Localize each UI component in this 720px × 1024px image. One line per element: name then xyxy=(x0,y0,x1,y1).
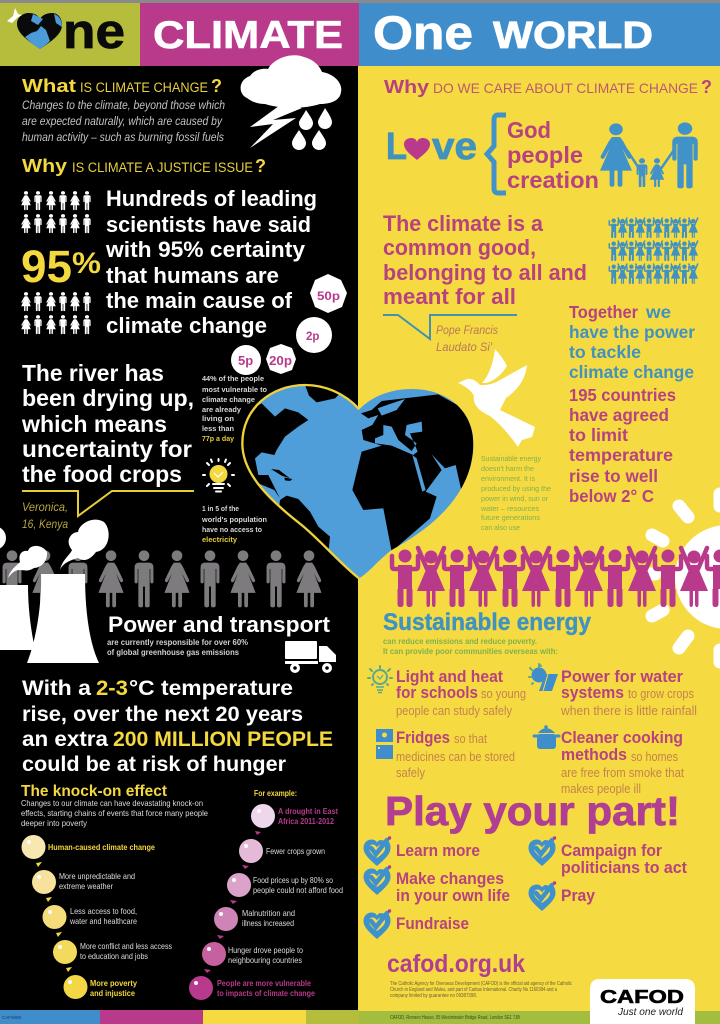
icon: family xyxy=(600,122,698,188)
text: together we have the power: Together xyxy=(569,302,638,322)
headline: 200 million people at risk of hunger xyxy=(22,677,333,776)
text: knock-on intro xyxy=(21,798,208,828)
heading: why do we care: Why xyxy=(384,77,429,97)
quote: river drying up: The river has xyxy=(22,360,164,386)
item: power for water systems: Power for water xyxy=(561,668,684,686)
chain: East Africa example steps: people could not afford food xyxy=(253,885,343,895)
text: sustainable energy explanation: water – resources xyxy=(480,504,539,513)
land: caribbean islands xyxy=(271,469,292,481)
chain: general knock-on steps: Human-caused climate change xyxy=(48,842,155,852)
text block: electricity access: have no access to xyxy=(202,525,262,534)
text: sustainable energy intro: It can provide poor communities overseas with: xyxy=(383,646,558,656)
item: light and heat: for schools xyxy=(396,684,478,702)
item: cleaner cooking: methods xyxy=(561,746,627,764)
text block: 44% vulnerable: most vulnerable to xyxy=(202,385,267,394)
item: power for water systems xyxy=(560,668,697,718)
heading: what is climate change xyxy=(22,76,222,96)
stat: 95%: 95 xyxy=(21,241,72,292)
land: greenland xyxy=(305,386,339,402)
heading: power and transport: Power and transport xyxy=(108,612,331,637)
icon: rows of people below 95% xyxy=(21,292,91,334)
text block: climate change definition xyxy=(22,100,225,144)
chain: East Africa example steps: A drought in East xyxy=(278,806,338,816)
text: together we have the power: climate change xyxy=(569,362,694,382)
text block: scientists statement: the main cause of xyxy=(106,288,293,313)
love word with heart: ve xyxy=(432,126,477,168)
icon: light bulb xyxy=(203,459,234,492)
footer colour strip left xyxy=(0,1010,359,1024)
headline: 200 million people at risk of hunger: rise, over the next 20 years xyxy=(22,703,303,726)
text: 195 countries agreement: to limit xyxy=(569,425,628,445)
CAFOD logo: CAFOD xyxy=(600,987,684,1007)
text: knock-on intro: Changes to our climate can have devastating knock-on xyxy=(21,798,203,808)
text block: electricity access: world's population xyxy=(201,515,267,524)
item: cleaner cooking: are free from smoke that xyxy=(561,765,684,780)
text block: climate change definition: human activity – such as burning fossil fuels xyxy=(22,132,224,144)
heading: what is climate change: IS CLIMATE CHANGE xyxy=(80,80,208,95)
text block: electricity access: 1 in 5 of the xyxy=(202,504,239,513)
item: fridges xyxy=(396,729,515,780)
headline: 200 million people at risk of hunger: 200 MILLION PEOPLE xyxy=(113,728,333,751)
title: CLIMATE: CLIMATE xyxy=(153,14,343,57)
quote attribution: Pope Francis xyxy=(436,323,498,354)
text: together we have the power: to tackle xyxy=(569,342,641,362)
text: sustainable energy intro: can reduce emissions and reduce poverty. xyxy=(383,636,537,646)
quote: river drying up xyxy=(21,360,194,487)
text block: scientists statement: Hundreds of leading xyxy=(106,186,317,211)
text: sustainable energy explanation: Sustainable energy xyxy=(481,454,541,463)
chain: general knock-on steps: More conflict and less access xyxy=(80,941,172,951)
chain: East Africa example steps: illness increased xyxy=(242,918,294,928)
text: sustainable energy explanation: environment. It is xyxy=(481,474,535,483)
checklist: right column: Campaign for xyxy=(561,842,663,860)
small print: company limited by guarantee no 09387398. xyxy=(390,993,477,999)
coins: 50p, 2p, 5p, 20p: 5p xyxy=(238,353,253,368)
icon: green bulb xyxy=(368,666,392,692)
text block: climate change definition: are expected naturally, which are caused by xyxy=(22,116,223,128)
love word with heart xyxy=(386,126,477,168)
text: God people creation: creation xyxy=(507,167,599,193)
headline: 200 million people at risk of hunger: With a xyxy=(22,677,91,700)
checklist: left column: Learn more xyxy=(396,842,480,860)
icon: chain of people holding hands xyxy=(392,548,720,607)
text: greenhouse gas share: are currently responsible for over 60% xyxy=(107,637,248,647)
heading: why do we care xyxy=(384,77,712,97)
love word with heart: L xyxy=(386,126,407,168)
text: 195 countries agreement: temperature xyxy=(569,445,673,465)
header band xyxy=(0,0,720,66)
quote: river drying up: which means xyxy=(21,411,167,437)
headline: 200 million people at risk of hunger: could be at risk of hunger xyxy=(22,753,286,776)
chain: general knock-on steps xyxy=(22,835,172,999)
text: greenhouse gas share: of global greenhouse gas emissions xyxy=(107,647,239,657)
item: power for water systems: to grow crops xyxy=(628,686,694,701)
text block: 44% vulnerable: 77p a day xyxy=(202,434,235,443)
text block: 44% vulnerable: are already xyxy=(202,405,242,414)
text: sustainable energy explanation: can also use xyxy=(481,523,520,532)
small print: Church in England and Wales, and part of Caritas International. Charity No 1160384 and a xyxy=(390,987,557,993)
text block: 44% vulnerable: climate change xyxy=(202,395,255,404)
text block: scientists statement: that humans are xyxy=(106,263,279,288)
text block: electricity access xyxy=(201,504,267,544)
brace xyxy=(487,115,506,193)
text block: 44% vulnerable xyxy=(202,374,267,443)
label: for example: For example: xyxy=(254,789,297,798)
heading: why do we care: DO WE CARE ABOUT CLIMATE CHANGE xyxy=(433,80,698,96)
quote attribution: Pope Francis: Pope Francis xyxy=(436,323,498,337)
icon: solar panel with sun xyxy=(529,664,558,691)
coins: 50p, 2p, 5p, 20p: 2p xyxy=(306,331,319,343)
coins: 50p, 2p, 5p, 20p: 20p xyxy=(269,353,292,368)
quote: river drying up: the food crops xyxy=(22,461,182,487)
land: eurasia and africa xyxy=(352,394,475,552)
chain: East Africa example steps: Malnutrition and xyxy=(242,908,295,918)
checklist: left column: in your own life xyxy=(396,887,510,905)
chain: general knock-on steps: and injustice xyxy=(90,988,135,998)
text block: scientists statement: with 95% certainty xyxy=(105,237,306,262)
text: greenhouse gas share xyxy=(107,637,248,657)
heading: what is climate change: What xyxy=(22,76,76,96)
item: cleaner cooking: Cleaner cooking xyxy=(561,729,683,747)
footer strip right: CAFOD, Romero House, 55 Westminster Bridge Road, London SE1 7JB xyxy=(390,1015,521,1021)
quote attribution: Veronica: Veronica, xyxy=(22,500,68,514)
item: fridges: Fridges xyxy=(396,729,450,747)
quote: river drying up: uncertainty for xyxy=(22,436,192,462)
checklist: right column: Pray xyxy=(561,887,596,905)
icon: cooling towers with smoke xyxy=(0,520,109,663)
text: together we have the power: have the power xyxy=(569,322,695,342)
stat: 95%: % xyxy=(72,247,101,280)
text: 195 countries agreement xyxy=(569,385,676,506)
quote: climate common good: belonging to all and xyxy=(383,260,587,285)
text: sustainable energy explanation: future generations xyxy=(481,513,540,522)
title: One WORLD xyxy=(373,6,653,59)
text block: scientists statement xyxy=(105,186,317,338)
text block: scientists statement: climate change xyxy=(106,313,267,338)
heading: why is climate a justice issue: IS CLIMATE A JUSTICE ISSUE xyxy=(72,160,253,175)
quote attribution: Pope Francis: Laudato Si' xyxy=(436,340,493,354)
small print xyxy=(390,981,572,999)
checklist: left column: Fundraise xyxy=(396,915,469,933)
sea: red sea xyxy=(412,455,426,492)
chain: East Africa example steps: Hunger drove people to xyxy=(228,945,303,955)
chain: East Africa example steps: neighbouring countries xyxy=(228,955,302,965)
land: south america xyxy=(278,496,330,553)
quote attribution: Veronica: 16, Kenya xyxy=(22,517,68,531)
text block: scientists statement: scientists have said xyxy=(106,212,311,237)
icon: truck xyxy=(285,641,336,673)
coins: 50p, 2p, 5p, 20p: 50p xyxy=(317,291,340,303)
headline: 200 million people at risk of hunger: 2-3 xyxy=(96,677,128,700)
text block: electricity access: electricity xyxy=(202,535,238,544)
chain: East Africa example steps: People are more vulnerable xyxy=(217,978,311,988)
quote: climate common good: common good, xyxy=(383,235,536,260)
text: 195 countries agreement: have agreed xyxy=(569,405,669,425)
item: light and heat: so young xyxy=(481,686,526,701)
logo word: ne: ne xyxy=(63,5,125,59)
icon: fridge xyxy=(376,729,393,759)
text block: 44% vulnerable: 44% of the people xyxy=(202,374,264,383)
icon: rows of people above 95% xyxy=(21,191,91,233)
title: One WORLD: One xyxy=(373,6,473,59)
chain: general knock-on steps: extreme weather xyxy=(59,881,113,891)
item: cleaner cooking: so homes xyxy=(631,749,678,764)
text: 195 countries agreement: rise to well xyxy=(569,466,658,486)
quote: river drying up: been drying up, xyxy=(22,385,194,411)
speech bubble line xyxy=(22,491,194,516)
text: knock-on intro: effects, starting chains of events that force many people xyxy=(21,808,208,818)
chain: East Africa example steps: Fewer crops grown xyxy=(266,846,325,856)
icon: storm cloud with lightning and rain xyxy=(241,55,341,150)
quote: climate common good xyxy=(383,211,587,309)
text: 195 countries agreement: 195 countries xyxy=(569,385,676,405)
footer strip right xyxy=(359,1011,720,1024)
chain: general knock-on steps: More unpredictable and xyxy=(59,871,135,881)
item: cleaner cooking xyxy=(561,729,684,796)
text: sustainable energy explanation: power in wind, sun or xyxy=(481,494,548,503)
CAFOD logo: Just one world xyxy=(617,1007,683,1018)
headline: 200 million people at risk of hunger: °C temperature xyxy=(129,677,293,700)
item: light and heat: people can study safely xyxy=(396,703,512,718)
text: knock-on intro: deeper into poverty xyxy=(21,818,88,828)
chain: East Africa example steps: to impacts of climate change xyxy=(217,988,315,998)
checklist: left column: Make changes xyxy=(396,870,504,888)
website link: cafod.org.uk xyxy=(387,950,525,978)
text: sustainable energy intro xyxy=(383,636,558,656)
item: fridges: so that xyxy=(454,731,487,746)
CAFOD logo xyxy=(590,979,695,1024)
item: cleaner cooking: makes people ill xyxy=(561,781,641,796)
heading: what is climate change: ? xyxy=(211,76,222,96)
heading: why is climate a justice issue: Why xyxy=(22,156,67,176)
text: 195 countries agreement: below 2° C xyxy=(569,486,654,506)
stat: 95% xyxy=(21,241,101,292)
chain: general knock-on steps: Less access to food, xyxy=(70,906,137,916)
text: sustainable energy explanation: doesn't harm the xyxy=(481,464,534,473)
chain: East Africa example steps: Africa 2011-2012 xyxy=(278,816,334,826)
text: God people creation: people xyxy=(507,142,583,168)
coins: 50p, 2p, 5p, 20p xyxy=(231,274,347,375)
item: light and heat xyxy=(396,668,526,718)
item: power for water systems: systems xyxy=(561,684,624,702)
item: power for water systems: when there is little rainfall xyxy=(560,703,697,718)
heading: why is climate a justice issue xyxy=(22,156,266,176)
checklist: right column: politicians to act xyxy=(561,859,687,877)
text: sustainable energy explanation: produced by using the xyxy=(481,484,551,493)
chain: general knock-on steps: water and healthcare xyxy=(69,916,137,926)
text: God people creation: God xyxy=(507,117,551,143)
item: fridges: safely xyxy=(396,765,425,780)
icon: cooking pot xyxy=(534,725,559,749)
quote: climate common good: The climate is a xyxy=(383,211,544,236)
icon: sun xyxy=(647,494,720,662)
icon: crowd of people xyxy=(609,218,698,284)
text block: 44% vulnerable: living on xyxy=(202,414,234,423)
quote: climate common good: meant for all xyxy=(383,284,516,309)
checklist: left column xyxy=(364,836,510,939)
heading: play your part: Play your part! xyxy=(385,788,680,834)
chain: East Africa example steps: Food prices up by 80% so xyxy=(253,875,333,885)
checklist: right column xyxy=(528,836,687,911)
chain: East Africa example steps xyxy=(189,804,343,1000)
text: sustainable energy explanation xyxy=(480,454,551,532)
heading: the knock-on effect: The knock-on effect xyxy=(21,783,168,800)
title: One WORLD: WORLD xyxy=(493,15,653,57)
small print: The Catholic Agency for Overseas Development (CAFOD) is the official aid agency of the Catholic xyxy=(390,981,572,987)
text: together we have the power xyxy=(569,302,695,382)
text: God people creation xyxy=(507,117,599,193)
speech line: pope quote xyxy=(383,315,517,339)
chain: general knock-on steps: More poverty xyxy=(90,978,137,988)
icon: grey row of people xyxy=(3,550,322,607)
sea: mediterranean and europe xyxy=(375,399,422,455)
heading: why is climate a justice issue: ? xyxy=(255,156,266,176)
globe heart xyxy=(238,385,475,578)
headline: 200 million people at risk of hunger: an extra xyxy=(22,728,108,751)
item: light and heat: Light and heat xyxy=(396,668,503,686)
text block: 44% vulnerable: less than xyxy=(202,424,234,433)
chain: general knock-on steps: to education and jobs xyxy=(80,951,148,961)
land: north america xyxy=(238,403,308,498)
item: fridges: medicines can be stored xyxy=(396,749,515,764)
heading: sustainable energy: Sustainable energy xyxy=(383,609,592,636)
quote attribution: Veronica xyxy=(22,500,68,531)
footer colour strip left: CAF/8/06 xyxy=(2,1015,22,1020)
text: together we have the power: we xyxy=(645,302,671,322)
heading: why do we care: ? xyxy=(701,77,712,97)
logo: heart globe xyxy=(7,8,62,49)
text block: climate change definition: Changes to the climate, beyond those which xyxy=(22,100,225,112)
icon: dove xyxy=(458,349,535,447)
